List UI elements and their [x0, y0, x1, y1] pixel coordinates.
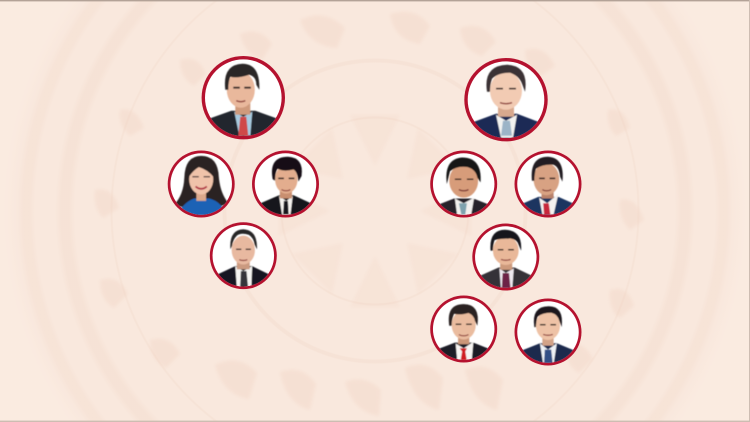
group: left portraits: [168, 56, 319, 289]
right border line: [749, 0, 750, 422]
portrait: man in blue suit with red tie: [515, 151, 581, 217]
top border line: [0, 0, 750, 1]
portrait: man with red tie: [202, 56, 285, 139]
portrait: older man with striped tie: [210, 222, 277, 289]
portrait: man in navy suit with light tie: [464, 58, 548, 141]
bottom border line: [0, 421, 750, 422]
portrait: young man with striped blue tie: [515, 299, 581, 365]
portrait: man with dark suit and black tie: [252, 151, 319, 217]
portrait: man with maroon tie: [472, 224, 539, 290]
portrait: man with bright red tie: [430, 296, 497, 362]
portrait: heavyset man with teal tie: [430, 151, 497, 217]
group: right portraits: [430, 58, 581, 365]
bronze drum motifs: [95, 12, 644, 416]
portrait: woman in blue ao dai: [168, 151, 235, 217]
